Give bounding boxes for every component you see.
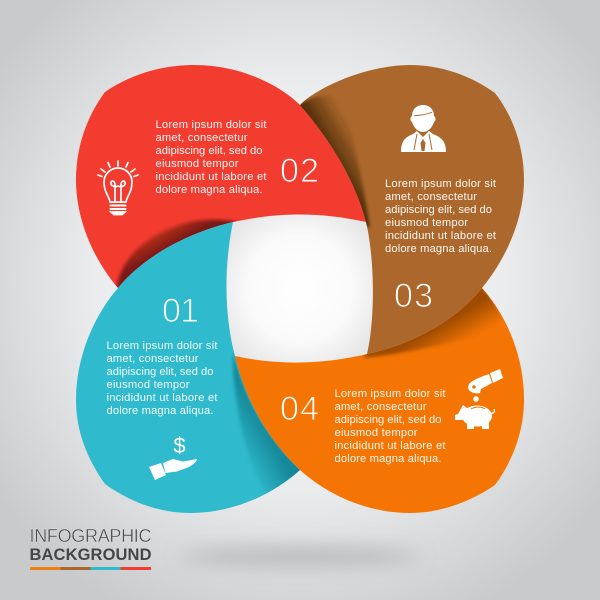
text: panel 04: Lorem ipsum dolor sit bbox=[334, 388, 446, 400]
panel 03: brown petal bbox=[296, 65, 524, 354]
icon: businessman bbox=[401, 105, 446, 152]
number 02: 02 bbox=[280, 152, 319, 190]
text: panel 03: Lorem ipsum dolor sit bbox=[385, 178, 497, 190]
title line 2: BACKGROUND bbox=[30, 546, 152, 564]
title line 1: INFOGRAPHIC bbox=[30, 526, 152, 546]
icon: hand with dollar bbox=[149, 433, 197, 480]
text: panel 03: amet, consectetur bbox=[385, 191, 477, 203]
center panel bbox=[226, 214, 373, 363]
text: panel 03: adipiscing elit, sed do bbox=[385, 204, 492, 216]
text: panel 01: Lorem ipsum dolor sit bbox=[106, 340, 218, 352]
panel 04: orange petal bbox=[235, 284, 524, 513]
text: panel 02: amet, consectetur bbox=[156, 132, 248, 144]
text: panel 02: incididunt ut labore et bbox=[156, 171, 267, 183]
text: panel 04: dolore magna aliqua. bbox=[334, 453, 442, 465]
text: panel 02: eiusmod tempor bbox=[156, 158, 239, 170]
floor shadow bbox=[180, 549, 420, 563]
icon: light bulb bbox=[98, 161, 138, 214]
text: panel 01: dolore magna aliqua. bbox=[106, 405, 214, 417]
text: panel 03: dolore magna aliqua. bbox=[385, 243, 492, 255]
number 04: 04 bbox=[280, 390, 319, 428]
number 01: 01 bbox=[162, 292, 199, 330]
text: panel 04: adipiscing elit, sed do bbox=[334, 414, 442, 426]
text: panel 01: adipiscing elit, sed do bbox=[106, 366, 214, 378]
text: panel 01: incididunt ut labore et bbox=[106, 392, 218, 404]
text: panel 04: eiusmod tempor bbox=[334, 427, 418, 439]
colour bar bbox=[30, 567, 151, 570]
text: panel 01: eiusmod tempor bbox=[106, 379, 190, 391]
text: panel 03: incididunt ut labore et bbox=[385, 230, 497, 242]
text: panel 02: Lorem ipsum dolor sit bbox=[156, 119, 267, 131]
icon: hand with dollar: $ bbox=[173, 433, 186, 458]
text: panel 02: adipiscing elit, sed do bbox=[156, 145, 262, 157]
text: panel 04: incididunt ut labore et bbox=[334, 440, 446, 452]
number 03: 03 bbox=[394, 277, 433, 315]
icon: hand and piggy bank bbox=[455, 369, 503, 429]
text: panel 03: eiusmod tempor bbox=[385, 217, 468, 229]
text: panel 02: dolore magna aliqua. bbox=[156, 184, 262, 196]
title block bbox=[30, 526, 152, 570]
text: panel 04: amet, consectetur bbox=[334, 401, 427, 413]
panel 02: red petal bbox=[76, 65, 366, 292]
text: panel 01: amet, consectetur bbox=[106, 353, 199, 365]
panel 01: teal petal bbox=[76, 222, 305, 513]
